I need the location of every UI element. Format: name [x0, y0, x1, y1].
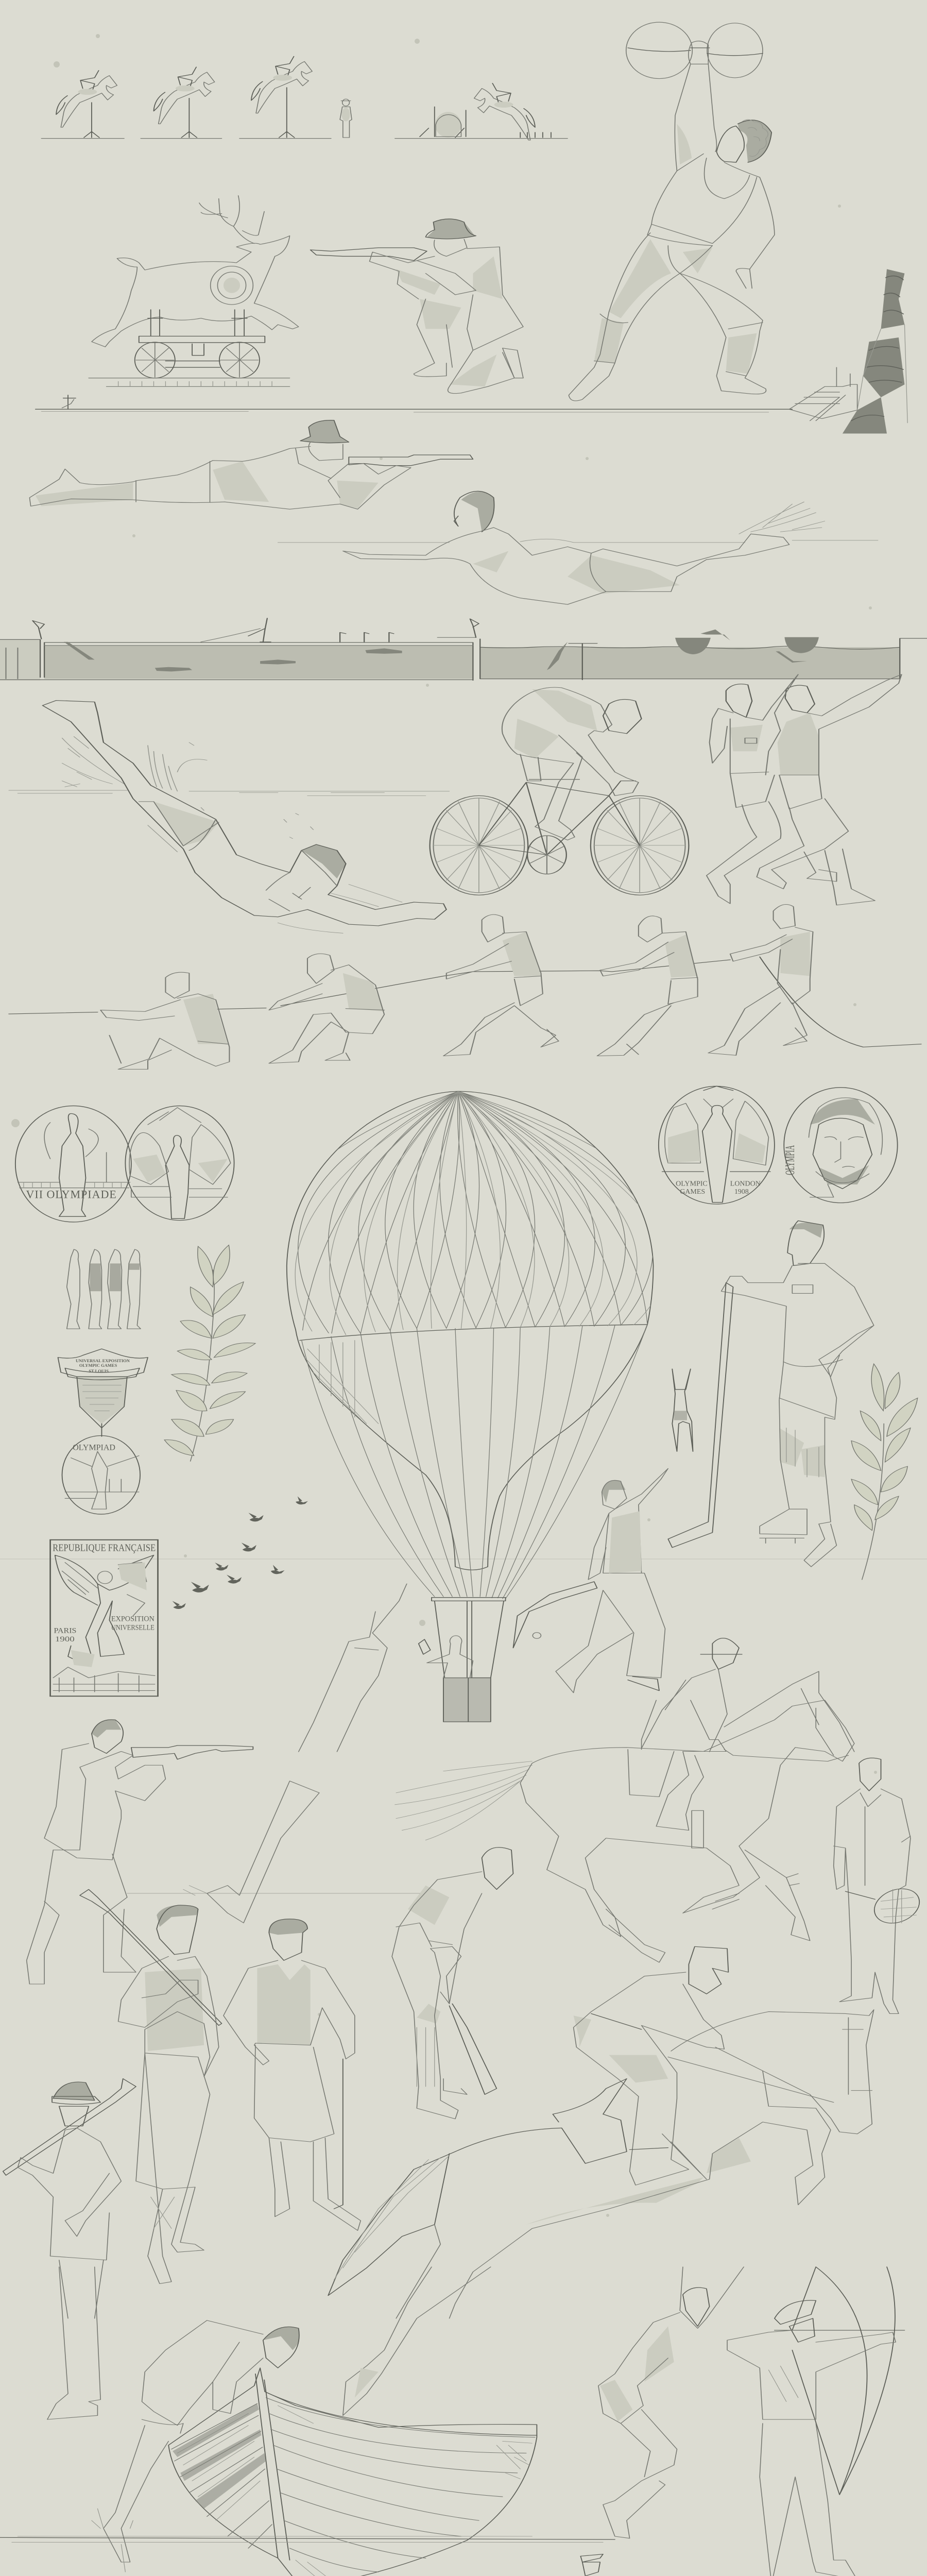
section: top panel [29, 22, 907, 604]
section: balloon panel [15, 1086, 918, 1752]
figure: polo rider and horse top [642, 1638, 854, 1752]
figure: archer with bow [727, 2267, 904, 2576]
figure: standing rifleman [27, 1720, 253, 1984]
poster: Paris 1900 [50, 1540, 158, 1696]
figure: horse with rider (top) [395, 1700, 854, 1962]
poster: Paris 1900: 1900 [55, 1635, 75, 1643]
poster: Paris 1900: EXPOSITION [111, 1615, 154, 1623]
figure: legs of mallet man [47, 2267, 100, 2419]
hockey player [668, 1221, 874, 1567]
diver reaching up: torso [299, 1584, 407, 1752]
medal: St Louis: OLYMPIC GAMES [79, 1363, 117, 1368]
stag target on rail cart [89, 196, 299, 386]
figure: show jumper with rider [328, 1946, 874, 2318]
figure: engine driver [575, 2554, 656, 2576]
tug of war [9, 904, 921, 1069]
figure: small diver [672, 1369, 693, 1451]
medal: London 1908 front: OLYMPIC [676, 1180, 708, 1188]
figure: man pushing boat [0, 2320, 615, 2572]
flock of birds [170, 1496, 308, 1610]
pool left [0, 618, 479, 681]
weightlifter [569, 22, 775, 401]
pool right [480, 630, 927, 680]
icon: standing official [340, 99, 352, 138]
section: pools and athletes [0, 618, 927, 1069]
figure: golfer with club [80, 1889, 222, 2284]
medal: reverse [125, 1106, 234, 1221]
diver [9, 701, 449, 933]
medal: London 1908 front: 1908 [734, 1188, 749, 1196]
figure: cricketer [392, 1848, 513, 2119]
section: athletes panel [3, 1700, 927, 2318]
icon: jumper over wall [395, 83, 568, 140]
olive branch right [851, 1364, 918, 1580]
medal: VII Olympiade [15, 1106, 131, 1222]
swimmer [278, 491, 878, 604]
olive branch left [164, 1245, 255, 1461]
rock and stair scenery [789, 269, 907, 434]
medal: London 1908 front [659, 1086, 775, 1204]
two runners [707, 674, 902, 905]
figure: hurley player [513, 1468, 668, 1693]
four athletes lineup [67, 1249, 141, 1329]
small shooter and ground line [36, 395, 792, 412]
medal: St Louis: UNIVERSAL EXPOSITION [76, 1358, 130, 1363]
medal: Olympia head: OLYMPIA [783, 1145, 797, 1175]
medal: London 1908 front: LONDON [730, 1180, 761, 1188]
hot air balloon [267, 1091, 680, 1722]
icon: three show jumpers [41, 56, 331, 139]
medal: VII Olympiade: VII OLYMPIADE [26, 1188, 117, 1201]
poster: Paris 1900: PARIS [54, 1627, 76, 1635]
poster: Paris 1900: REPUBLIQUE FRANÇAISE [53, 1542, 156, 1553]
poster: Paris 1900: UNIVERSELLE [111, 1624, 154, 1632]
figure: rowing boat hull [168, 2368, 537, 2576]
medal: London 1908 front: GAMES [680, 1188, 705, 1196]
medal: St Louis: OLYMPIAD [73, 1444, 115, 1452]
medal: Olympia head [783, 1088, 898, 1203]
medal: St Louis [58, 1349, 148, 1514]
figure: man with croquet mallet [3, 2079, 136, 2318]
shooter's ground line [127, 1781, 420, 1923]
figure: athlete jumping [598, 2267, 744, 2538]
medal: St Louis: ST LOUIS [89, 1368, 109, 1374]
kneeling rifleman [311, 219, 523, 394]
section: bottom panel [0, 2267, 919, 2576]
figure: tennis player [834, 1758, 927, 2013]
prone rifleman [29, 420, 473, 509]
cyclist [430, 687, 689, 895]
figure: golfer with stick [224, 1919, 360, 2230]
figure: horse hoof [343, 2267, 491, 2415]
